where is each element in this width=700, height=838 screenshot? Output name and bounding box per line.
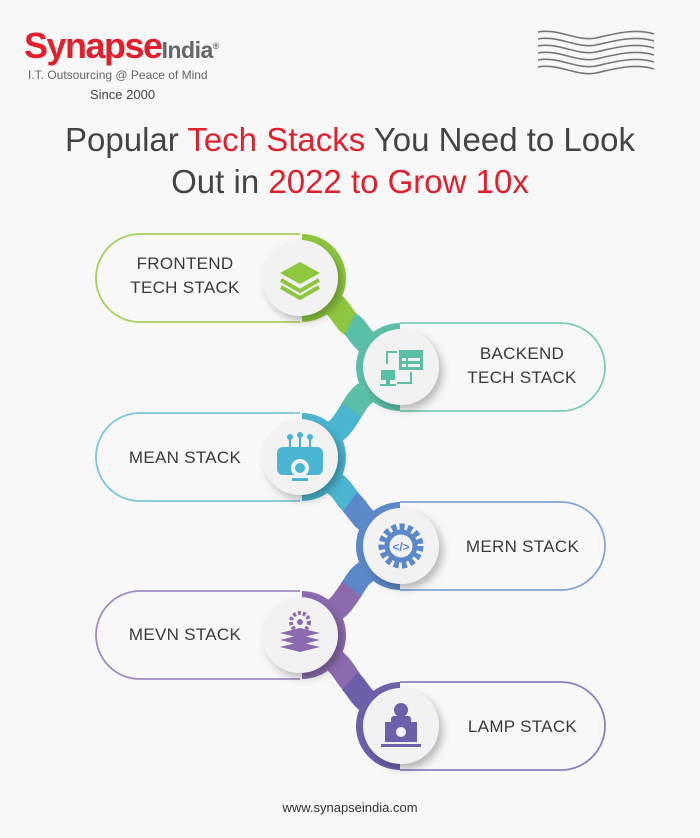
title: Popular Tech Stacks You Need to Look xyxy=(65,121,635,158)
text: mean: MEAN STACK xyxy=(129,448,241,467)
icon: lamp xyxy=(363,688,439,764)
icon: mevn xyxy=(262,597,338,673)
title: Out in 2022 to Grow 10x xyxy=(171,163,529,200)
text: frontend: TECH STACK xyxy=(130,278,240,297)
logo: I.T. Outsourcing @ Peace of Mind xyxy=(28,68,208,82)
icon: mean xyxy=(262,419,338,495)
logo: SynapseIndia® xyxy=(24,25,218,66)
icon: mern gear xyxy=(363,508,439,584)
footer url: www.synapseindia.com xyxy=(282,800,418,815)
icon: frontend layers xyxy=(262,240,338,316)
text: backend xyxy=(467,344,577,387)
decorative waves xyxy=(538,30,654,74)
title xyxy=(65,121,635,200)
pills xyxy=(96,234,605,770)
text: backend: TECH STACK xyxy=(467,368,577,387)
text: backend: BACKEND xyxy=(480,344,564,363)
logo xyxy=(24,25,220,102)
logo: Since 2000 xyxy=(90,87,155,102)
text: frontend: FRONTEND xyxy=(137,254,233,273)
half discs xyxy=(302,234,346,322)
text: lamp: LAMP STACK xyxy=(468,717,577,736)
text: mern: MERN STACK xyxy=(466,537,579,556)
text: frontend xyxy=(130,254,240,297)
icon: backend xyxy=(363,329,439,405)
text: mevn: MEVN STACK xyxy=(129,625,241,644)
icon: mern gear: </> xyxy=(392,540,410,554)
connectors xyxy=(330,300,372,704)
